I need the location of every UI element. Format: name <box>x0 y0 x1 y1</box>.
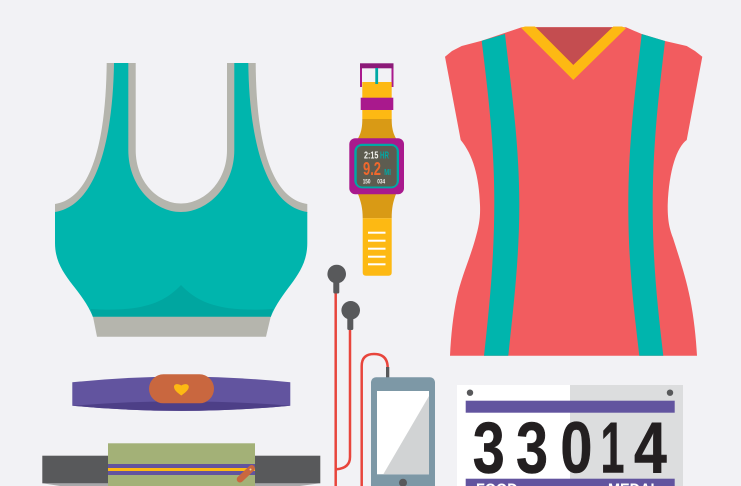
shirt collar <box>521 26 626 80</box>
upper strap <box>358 68 396 138</box>
watch face: HR <box>380 149 389 161</box>
watch face: MI <box>384 169 391 177</box>
icon: earphones <box>327 265 388 486</box>
zipper <box>108 464 255 479</box>
watch face: 034 <box>377 179 386 186</box>
race bib <box>457 385 683 486</box>
bib number: 0 <box>560 408 592 486</box>
icon: sports bra <box>55 63 307 337</box>
lower strap <box>358 194 396 276</box>
left earbud <box>327 265 346 294</box>
heart <box>174 384 189 396</box>
icon: smartphone <box>371 367 435 486</box>
bib number: 4 <box>634 407 667 486</box>
icon: sports watch <box>349 63 404 276</box>
bib number: 3 <box>516 408 548 486</box>
watch face <box>349 138 404 194</box>
small stats: 150 <box>363 179 370 186</box>
distance readout: 9.2 <box>363 160 381 180</box>
bib number <box>473 407 667 486</box>
icon: heart rate strap <box>72 374 290 411</box>
bib labels <box>476 481 660 486</box>
time readout: 2:15 <box>364 149 379 161</box>
watch buckle <box>360 63 394 87</box>
bib number: 3 <box>473 408 505 486</box>
right earbud <box>341 301 360 330</box>
earphone wires <box>336 290 388 486</box>
icon: running waist belt <box>42 443 320 486</box>
belt pouch <box>108 443 255 486</box>
icon: red shirt <box>445 26 702 356</box>
shirt stripes <box>482 34 665 356</box>
